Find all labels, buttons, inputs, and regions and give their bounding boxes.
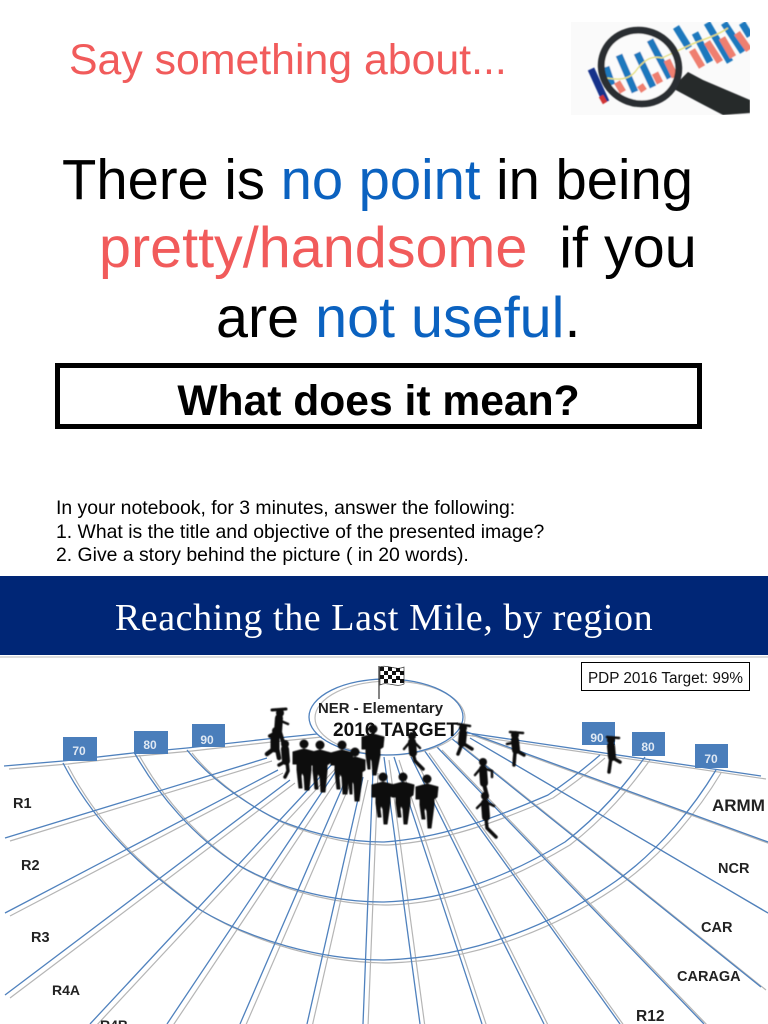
target callout	[581, 662, 750, 691]
side-view runner: upper right	[507, 731, 524, 765]
region R1: R1	[13, 796, 32, 812]
chart: race track by region	[0, 656, 768, 1024]
region labels	[13, 796, 765, 1024]
banner title: Reaching the Last Mile, by region	[115, 597, 653, 639]
banner title	[0, 576, 768, 655]
side-view runner: behind group	[279, 740, 289, 777]
region CAR: CAR	[701, 920, 733, 936]
marker 90 right	[582, 722, 615, 745]
marker 90 left: 90	[200, 733, 214, 747]
marker 70 right: 70	[704, 752, 718, 766]
marker 90 left	[192, 724, 225, 747]
runners silhouettes	[267, 709, 620, 837]
target callout: PDP 2016 Target: 99%	[588, 670, 743, 687]
side-view runner: far left lower	[267, 727, 280, 758]
quote line 3: are not useful.	[216, 286, 580, 350]
marker 80 left	[134, 731, 168, 754]
side-view runner: right middle	[475, 758, 492, 796]
region NCR: NCR	[718, 861, 750, 877]
marker 90 right: 90	[590, 731, 604, 745]
back-facing runner 2	[309, 740, 331, 792]
marker 80 right: 80	[641, 740, 655, 754]
region R2: R2	[21, 858, 40, 874]
region R4A: R4A	[52, 982, 80, 998]
side-view runner: far left upper	[270, 709, 288, 742]
main quote	[62, 148, 697, 350]
notebook instructions: In your notebook, for 3 minutes, answer the following: 1. What is the title and objective of the presented image? 2. Give a story behind the picture ( in 20 words).	[56, 497, 544, 566]
region ARMM: ARMM	[712, 796, 765, 815]
checkered flag	[379, 666, 404, 699]
quote line 1: There is no point in being	[62, 148, 693, 211]
side-view runner: far right	[607, 736, 620, 772]
back-facing runner 3	[331, 740, 353, 794]
side-view runner: right lower	[477, 792, 496, 837]
marker 80 left: 80	[143, 738, 157, 752]
label: 2016 target: 2016 TARGET	[333, 719, 458, 741]
back-facing runner 7	[392, 772, 414, 824]
quote line 2: pretty/handsome if you	[99, 216, 697, 280]
marker 70 left: 70	[72, 744, 86, 758]
marker 70 right	[695, 744, 728, 768]
region CARAGA: CARAGA	[677, 969, 741, 985]
marker 80 right	[632, 732, 665, 756]
side-view runner: center	[404, 732, 423, 769]
heading: say something about: Say something about...	[69, 36, 507, 84]
back-facing runner 6	[372, 772, 394, 824]
label: NER elementary: NER - Elementary	[318, 701, 444, 717]
track: gray shadow lines	[9, 735, 768, 1024]
side-view runner: ellipse right	[458, 724, 472, 754]
question box: What does it mean?	[177, 377, 580, 425]
finish ellipse	[309, 679, 465, 755]
region R3: R3	[31, 930, 50, 946]
back-facing runner 5	[362, 724, 384, 775]
back-facing runner 1	[293, 740, 315, 790]
back-facing runner 4	[346, 748, 365, 801]
image: magnifying glass over chart	[587, 22, 750, 115]
back-facing runner 8	[416, 774, 438, 828]
question box	[55, 363, 702, 429]
marker 70 left	[63, 737, 97, 761]
track: blue lines	[4, 732, 768, 1024]
